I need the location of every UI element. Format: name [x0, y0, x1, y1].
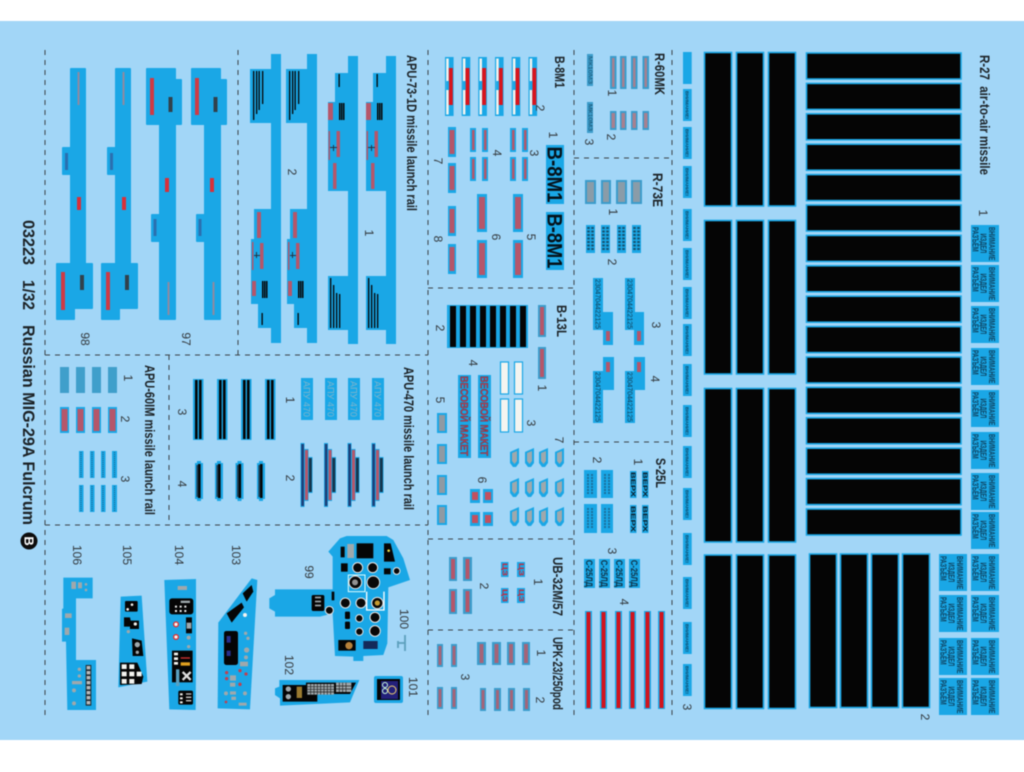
panel: decals 97 and 98: 97: [179, 332, 193, 346]
panel: R-27 air-to-air missile: [680, 52, 999, 721]
panel: B-8M1: В-8М1: [542, 214, 566, 269]
warning stencils: ВНИМАНИЕ: [955, 556, 963, 590]
warning stencils: ВНИМАНИЕ: [987, 267, 995, 301]
panel: APU-470 missile launch rail: 2: [283, 475, 297, 482]
warning stencils: ВНИМАНИЕ: [987, 392, 995, 426]
warning stencils: РАЗЪЕМ: [970, 475, 978, 500]
panel: B-8M1: В-8М1: [542, 146, 566, 203]
warning stencils: ИЗДЕЛ: [978, 441, 986, 460]
panel: R-73E: 3: [649, 322, 663, 329]
panel: B-8M1: B-8M1: [552, 56, 568, 88]
panel: R-73E: 2304704422125: [594, 372, 602, 422]
panel: R-73E: 2304704422125: [594, 279, 602, 329]
warning stencils: РАЗЪЕМ: [970, 227, 978, 252]
panel: APU-470 missile launch rail: 4: [175, 481, 189, 488]
panel: B-13L: ВЕСОВОЙ МАКЕТ: [458, 376, 470, 456]
panel: B-8M1: 7: [431, 158, 445, 165]
panel: S-25L: 1: [631, 459, 645, 466]
warning stencils: РАЗЪЕМ: [970, 392, 978, 417]
panel: R-60MK: R-60MK: [652, 53, 668, 95]
panel: decal 102: 102: [282, 655, 296, 675]
small label strip: ВНИМАНИЕ!: [684, 211, 690, 240]
warning stencils: РАЗЪЕМ: [970, 434, 978, 459]
warning stencils: ВНИМАНИЕ: [987, 680, 995, 714]
panel: B-13L: B-13L: [554, 305, 570, 337]
panel: APU-73-1D missile launch rail: [250, 54, 420, 344]
panel: UPK-23/250 pod: 2: [533, 697, 547, 704]
warning stencils: ВНИМАНИЕ: [987, 434, 995, 468]
panel: B-13L: [433, 305, 570, 526]
panel: B-8M1: 2: [533, 105, 547, 112]
panel: S-25L: ВЕРХ: [629, 472, 636, 498]
warning stencils: [938, 225, 999, 715]
panels: side consoles 103 to 106: 103: [229, 545, 243, 565]
sheet title: B: [22, 536, 36, 546]
panel: UB-32M/57: 2: [477, 583, 491, 590]
small label strip: ВНИМАНИЕ!: [684, 366, 690, 395]
panel: B-13L: 3: [524, 420, 538, 427]
panel: decal 101: [374, 676, 420, 703]
sheet title: [19, 220, 38, 550]
warning stencils: ИЗДЕЛ: [946, 647, 954, 666]
panel: APU-60IM missile launch rail: [60, 365, 158, 515]
small label strip: ВНИМАНИЕ!: [684, 579, 690, 608]
warning stencils: ИЗДЕЛ: [978, 234, 986, 253]
panel: B-13L: 2: [433, 325, 447, 332]
warning stencils: ИЗДЕЛ: [946, 604, 954, 623]
warning stencils: ИЗДЕЛ: [978, 315, 986, 334]
warning stencils: ВНИМАНИЕ: [987, 350, 995, 384]
warning stencils: ВНИМАНИЕ: [955, 680, 963, 714]
warning stencils: ИЗДЕЛ: [978, 357, 986, 376]
panel: UPK-23/250 pod: 3: [458, 674, 472, 681]
warning stencils: РАЗЪЕМ: [970, 514, 978, 539]
panel: APU-60IM missile launch rail: 2: [118, 416, 132, 423]
panel: APU-470 missile launch rail: 3: [175, 409, 189, 416]
warning stencils: ИЗДЕЛ: [946, 563, 954, 582]
panel: APU-470 missile launch rail: [175, 367, 417, 510]
icon: decal 100: [397, 609, 411, 651]
small label strip: ВНИМАНИЕ!: [684, 91, 690, 120]
small label strip: ВНИМАНИЕ!: [684, 168, 690, 197]
horizontal black bars: [806, 53, 961, 535]
panel: B-13L: 4: [466, 360, 480, 367]
panel: decal 102: [275, 655, 359, 706]
warning stencils: РАЗЪЕМ: [970, 556, 978, 581]
small label strip: ВНИМАНИЕ!: [684, 624, 690, 653]
panel: APU-470 missile launch rail: APU-470 missile launch rail: [401, 367, 417, 510]
panel: cockpit instrument decal 99: [269, 536, 410, 661]
warning stencils: ИЗДЕЛ: [978, 687, 986, 706]
panel: B-8M1: 8: [431, 236, 445, 243]
warning stencils: РАЗЪЕМ: [938, 597, 946, 622]
panel: S-25L: ВЕРХ: [629, 506, 636, 533]
warning stencils: РАЗЪЕМ: [970, 350, 978, 375]
panel: R-73E: [585, 173, 666, 423]
small label strip: ВНИМАНИЕ!: [684, 535, 690, 564]
warning stencils: РАЗЪЕМ: [938, 556, 946, 581]
panel: APU-73-1D missile launch rail: APU-73-1D missile launch rail: [404, 55, 420, 211]
small label strip: ВНИМАНИЕ!: [684, 129, 690, 158]
warning stencils: РАЗЪЕМ: [970, 267, 978, 292]
panel: S-25L: 2: [590, 457, 604, 464]
panel: UB-32M/57: 1: [531, 579, 545, 586]
warning stencils: РАЗЪЕМ: [938, 640, 946, 665]
panel: R-60MK: 1: [605, 90, 619, 97]
panel: B-8M1: 6: [489, 234, 503, 241]
panel: B-13L: 6: [475, 477, 489, 484]
panel: UB-32M/57: ЦЗ: [517, 589, 524, 603]
panels: side consoles 103 to 106: 104: [172, 545, 186, 565]
panel: APU-470 missile launch rail: АПУ 470: [348, 381, 358, 417]
panel: UPK-23/250 pod: 1: [534, 650, 548, 657]
warning stencils: РАЗЪЕМ: [970, 680, 978, 705]
panel: UB-32M/57: ЦЗ: [500, 589, 508, 603]
panel: APU-73-1D missile launch rail: 2: [285, 169, 299, 176]
panel: R-60MK: МК10МЗ: [586, 104, 592, 132]
panel: S-25L: С-25ЛД: [599, 560, 609, 587]
panel: B-13L: 7: [552, 437, 566, 444]
panels: side consoles 103 to 106: 105: [120, 545, 134, 565]
panel: R-60MK: 2: [604, 134, 618, 141]
warning stencils: ИЗДЕЛ: [978, 274, 986, 293]
panel: R-60MK: 3: [582, 139, 596, 146]
small label strip: ВНИМАНИЕ!: [684, 448, 690, 477]
panel: decal 101: 101: [406, 677, 420, 697]
panel: R-73E: 2: [605, 259, 619, 266]
panel: B-8M1: 5: [524, 234, 538, 241]
warning stencils: ИЗДЕЛ: [978, 521, 986, 540]
panel: R-73E: 1: [606, 209, 620, 216]
panel: S-25L: ВЕРХ: [641, 472, 648, 498]
panel: UB-32M/57: UB-32M/57: [550, 557, 566, 616]
panel: R-73E: 2304704422125: [626, 372, 634, 422]
warning stencils: ВНИМАНИЕ: [987, 227, 995, 261]
panel: R-27 air-to-air missile: 1: [976, 210, 990, 217]
panel: B-8M1: 4: [490, 150, 504, 157]
small label strip: ВНИМАНИЕ!: [684, 289, 690, 318]
panel: UPK-23/250 pod: UPK-23/250pod: [550, 637, 566, 710]
sheet title: 03223: [19, 220, 37, 265]
vertical black bars: [704, 52, 930, 708]
panel: S-25L: 4: [617, 599, 631, 606]
panel: UPK-23/250 pod: [437, 637, 566, 711]
panels: side consoles 103 to 106: 106: [70, 545, 84, 565]
small label strip: ВНИМАНИЕ!: [684, 407, 690, 436]
panel: APU-470 missile launch rail: 1: [283, 397, 297, 404]
panel: decals 97 and 98: 98: [78, 332, 92, 346]
warning stencils: ВНИМАНИЕ: [987, 475, 995, 509]
panel: APU-470 missile launch rail: АПУ 470: [326, 381, 336, 417]
panel: UB-32M/57: ЦЗ: [517, 563, 524, 577]
panel: APU-60IM missile launch rail: APU-60IM missile launch rail: [142, 365, 158, 515]
warning stencils: ВНИМАНИЕ: [987, 597, 995, 631]
warning stencils: ВНИМАНИЕ: [955, 640, 963, 674]
sheet title: Russian MIG-29A Fulcrum: [19, 325, 37, 525]
panel: B-8M1: 3: [527, 150, 541, 157]
panel: UB-32M/57: [449, 557, 566, 616]
warning stencils: РАЗЪЕМ: [938, 680, 946, 705]
panel: R-27 air-to-air missile: 3: [680, 704, 694, 711]
small label strip: ВНИМАНИЕ!: [684, 250, 690, 279]
panel: APU-470 missile launch rail: АПУ 470: [302, 381, 312, 417]
panel: S-25L: ВЕРХ: [641, 506, 648, 533]
panel: S-25L: 3: [605, 548, 619, 555]
warning stencils: РАЗЪЕМ: [970, 640, 978, 665]
panel: R-60MK: [582, 53, 668, 146]
warning stencils: ВНИМАНИЕ: [987, 556, 995, 590]
warning stencils: ИЗДЕЛ: [978, 482, 986, 501]
panel: decals 97 and 98: [56, 68, 227, 346]
panel: B-13L: 5: [433, 397, 447, 404]
panel: R-27 air-to-air missile: 2: [918, 714, 932, 721]
panel: R-73E: 4: [648, 376, 662, 383]
panel: R-27 air-to-air missile: R-27 air-to-air missile: [977, 55, 993, 175]
small label strip: ВНИМАНИЕ!: [684, 326, 690, 355]
panel: B-8M1: 1: [546, 132, 560, 139]
warning stencils: ВНИМАНИЕ: [987, 308, 995, 342]
panel: R-73E: 2304704422125: [626, 279, 634, 329]
panel: APU-60IM missile launch rail: 3: [118, 476, 132, 483]
warning stencils: ВНИМАНИЕ: [987, 514, 995, 548]
warning stencils: ИЗДЕЛ: [978, 399, 986, 418]
small label strip: ВНИМАНИЕ!: [684, 666, 690, 695]
warning stencils: ВНИМАНИЕ: [987, 640, 995, 674]
icon: decal 100: 100: [397, 609, 411, 629]
panel: cockpit instrument decal 99: 99: [302, 565, 316, 579]
warning stencils: ВНИМАНИЕ: [955, 597, 963, 631]
panel: S-25L: С-25ЛД: [584, 560, 594, 587]
panel: S-25L: [584, 457, 669, 709]
panel: B-8M1: [431, 56, 568, 278]
warning stencils: ИЗДЕЛ: [978, 604, 986, 623]
panel: UB-32M/57: ЦЗ: [500, 563, 508, 577]
warning stencils: РАЗЪЕМ: [970, 308, 978, 333]
panels: side consoles 103 to 106: [62, 545, 257, 710]
panel: B-13L: ВЕСОВОЙ МАКЕТ: [478, 376, 490, 456]
panel: APU-60IM missile launch rail: 1: [121, 375, 135, 382]
panel: R-73E: R-73E: [650, 173, 666, 207]
panel: APU-470 missile launch rail: АПУ 470: [372, 381, 382, 417]
panel: APU-73-1D missile launch rail: 1: [362, 230, 376, 237]
panel: B-13L: 1: [535, 385, 549, 392]
panel: S-25L: С-25ЛД: [614, 560, 624, 587]
warning stencils: ИЗДЕЛ: [978, 647, 986, 666]
small label strip: [683, 52, 692, 696]
warning stencils: ИЗДЕЛ: [978, 563, 986, 582]
sheet title: 1/32: [19, 280, 37, 310]
panel: S-25L: S-25L: [653, 458, 669, 488]
warning stencils: ИЗДЕЛ: [946, 687, 954, 706]
panel: S-25L: С-25ЛД: [629, 560, 639, 587]
warning stencils: РАЗЪЕМ: [970, 597, 978, 622]
panel: R-60MK: МК10МЗ: [586, 56, 592, 85]
small label strip: ВНИМАНИЕ!: [684, 490, 690, 519]
